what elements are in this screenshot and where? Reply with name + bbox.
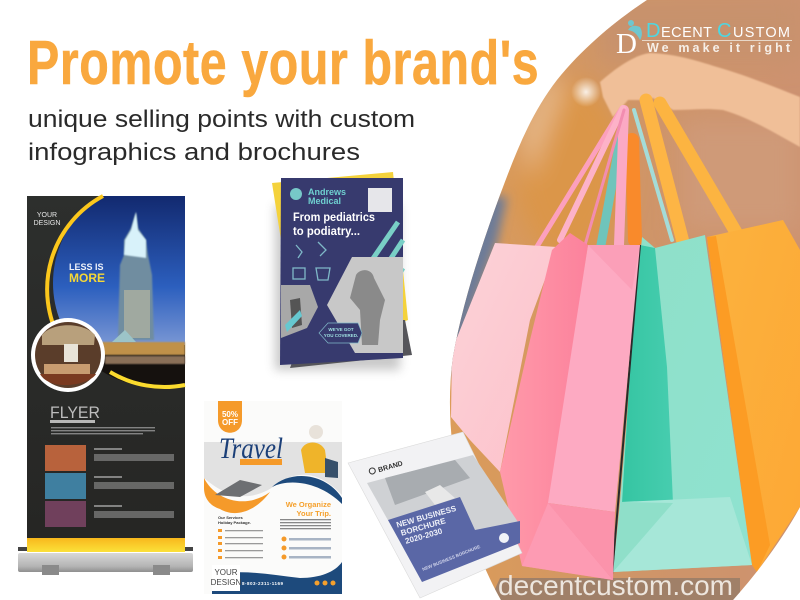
brochure photo <box>367 455 518 577</box>
banner less is more: LESS IS <box>69 262 104 272</box>
orange swoosh <box>204 478 270 513</box>
footer phone: 8-803-2311-1169 <box>242 581 284 586</box>
logo: C <box>717 20 731 42</box>
medical headline: to podiatry... <box>293 224 360 238</box>
covered badge <box>319 323 362 343</box>
brochure footer text: NEW BUSINESS BORCHURE <box>422 544 481 572</box>
logo: We make it right <box>647 41 791 55</box>
logo: D <box>646 20 660 42</box>
body icons <box>293 242 330 280</box>
dark sheet <box>290 320 412 368</box>
banner yellow strip <box>27 538 185 552</box>
teal bag <box>612 235 752 575</box>
subtitle: unique selling points with custom <box>28 106 415 133</box>
logo: USTOM <box>733 25 790 41</box>
hand and arm <box>600 53 800 147</box>
shopping photo panel <box>440 0 800 600</box>
yellow sheet <box>272 172 408 360</box>
flyer right column <box>280 519 331 560</box>
orange bag <box>707 220 800 572</box>
covered badge: WE'VE GOT <box>328 327 354 332</box>
organize heading: We Organize <box>286 500 331 509</box>
brochure title: 2020-2030 <box>404 526 444 546</box>
brochure title <box>395 504 463 547</box>
services text <box>218 515 251 525</box>
blue swoosh <box>272 476 342 504</box>
discount tag <box>218 401 242 433</box>
medical poster <box>272 172 412 370</box>
banner less is more: MORE <box>69 271 105 285</box>
brochure title: BORCHURE <box>400 516 447 538</box>
discount tag: OFF <box>222 418 238 427</box>
flyer list <box>218 529 263 559</box>
flyer footer <box>212 562 342 594</box>
roll-up banner <box>18 196 193 575</box>
flyer sheet <box>204 401 342 594</box>
subtitle: infographics and brochures <box>28 139 360 166</box>
organize heading <box>286 500 331 518</box>
logo <box>616 20 792 60</box>
navy front <box>280 178 403 365</box>
brochure sheet <box>348 432 522 598</box>
banner bedroom circle <box>31 318 105 392</box>
flyer photo <box>204 442 342 496</box>
brochure brand: BRAND <box>377 460 404 474</box>
brochure emblem <box>499 533 509 543</box>
your design box: YOUR <box>214 568 238 577</box>
qr placeholder <box>368 188 392 212</box>
medical photos <box>281 257 403 353</box>
banner stand <box>18 547 193 575</box>
travel script heading: Travel <box>219 432 283 465</box>
brochure title: NEW BUSINESS <box>395 504 458 530</box>
travel flyer <box>204 401 342 594</box>
subtitle <box>28 106 415 166</box>
medical headline: From pediatrics <box>293 210 375 224</box>
banner photo with arc <box>45 194 186 389</box>
title: Promote your brand's <box>27 28 539 97</box>
pink bag <box>451 233 640 580</box>
logo: ECENT <box>661 25 712 41</box>
your design box: DESIGN <box>211 578 242 587</box>
medical logo: Andrews <box>308 187 346 197</box>
your design box <box>211 565 242 591</box>
banner your design <box>34 212 60 227</box>
banner body text lines <box>50 420 174 518</box>
footer dots <box>314 580 336 586</box>
services text: Our Services <box>218 515 243 520</box>
travel tag <box>240 459 282 465</box>
banner body <box>27 196 185 538</box>
services text: Holiday Package. <box>218 520 251 525</box>
covered badge: YOU COVERED. <box>324 333 358 338</box>
banner less is more <box>69 262 105 285</box>
brochure blue panel <box>388 497 520 582</box>
business brochure <box>348 432 522 598</box>
medical logo: Medical <box>308 196 341 206</box>
logo mark: D <box>616 28 637 60</box>
banner your design: DESIGN <box>34 220 60 227</box>
traveler <box>301 425 338 478</box>
banner thumbnails <box>45 445 86 527</box>
banner your design: YOUR <box>37 212 57 219</box>
bag handles <box>530 100 737 258</box>
organize heading: Your Trip. <box>297 509 331 518</box>
medical headline <box>293 210 375 238</box>
stripes <box>372 222 403 285</box>
discount tag: 50% <box>222 410 238 419</box>
logo mark <box>616 20 642 60</box>
brochure brand <box>369 459 404 477</box>
banner flyer heading: FLYER <box>50 403 100 422</box>
medical logo <box>290 187 346 206</box>
